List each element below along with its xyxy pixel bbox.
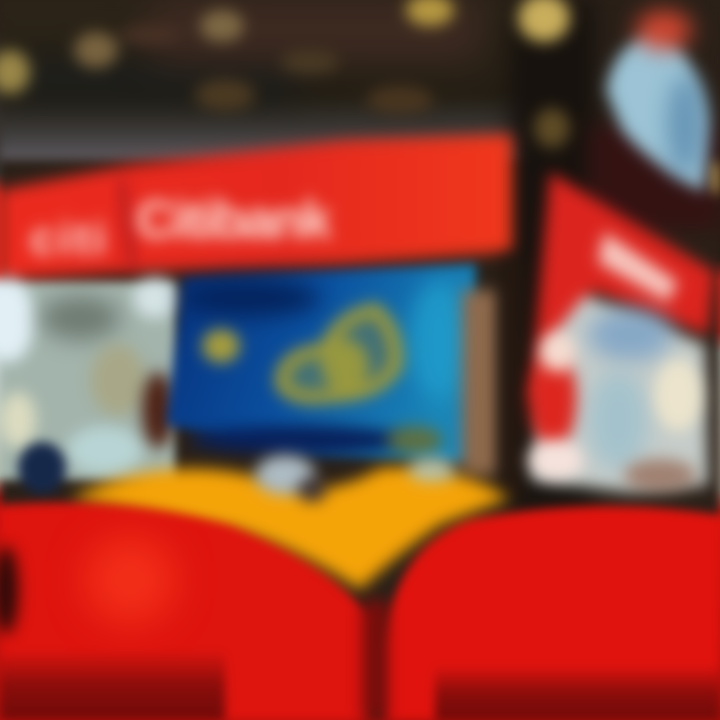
- top right sign: [606, 10, 720, 196]
- blue screen: [166, 264, 476, 462]
- right red sign: [528, 172, 715, 492]
- banner text: [30, 190, 333, 264]
- banner text: citi: [30, 212, 106, 264]
- ceiling lights: [0, 0, 570, 148]
- yellow counter: [70, 455, 510, 590]
- red foreground seats: [0, 502, 720, 720]
- red banner: [0, 134, 512, 280]
- right dark pillar and brown strip: [462, 255, 524, 500]
- gold emblem small: [202, 329, 240, 363]
- gold emblem large: [282, 310, 396, 398]
- banner text: Citibank: [136, 190, 333, 250]
- left storefront panel: [0, 278, 177, 494]
